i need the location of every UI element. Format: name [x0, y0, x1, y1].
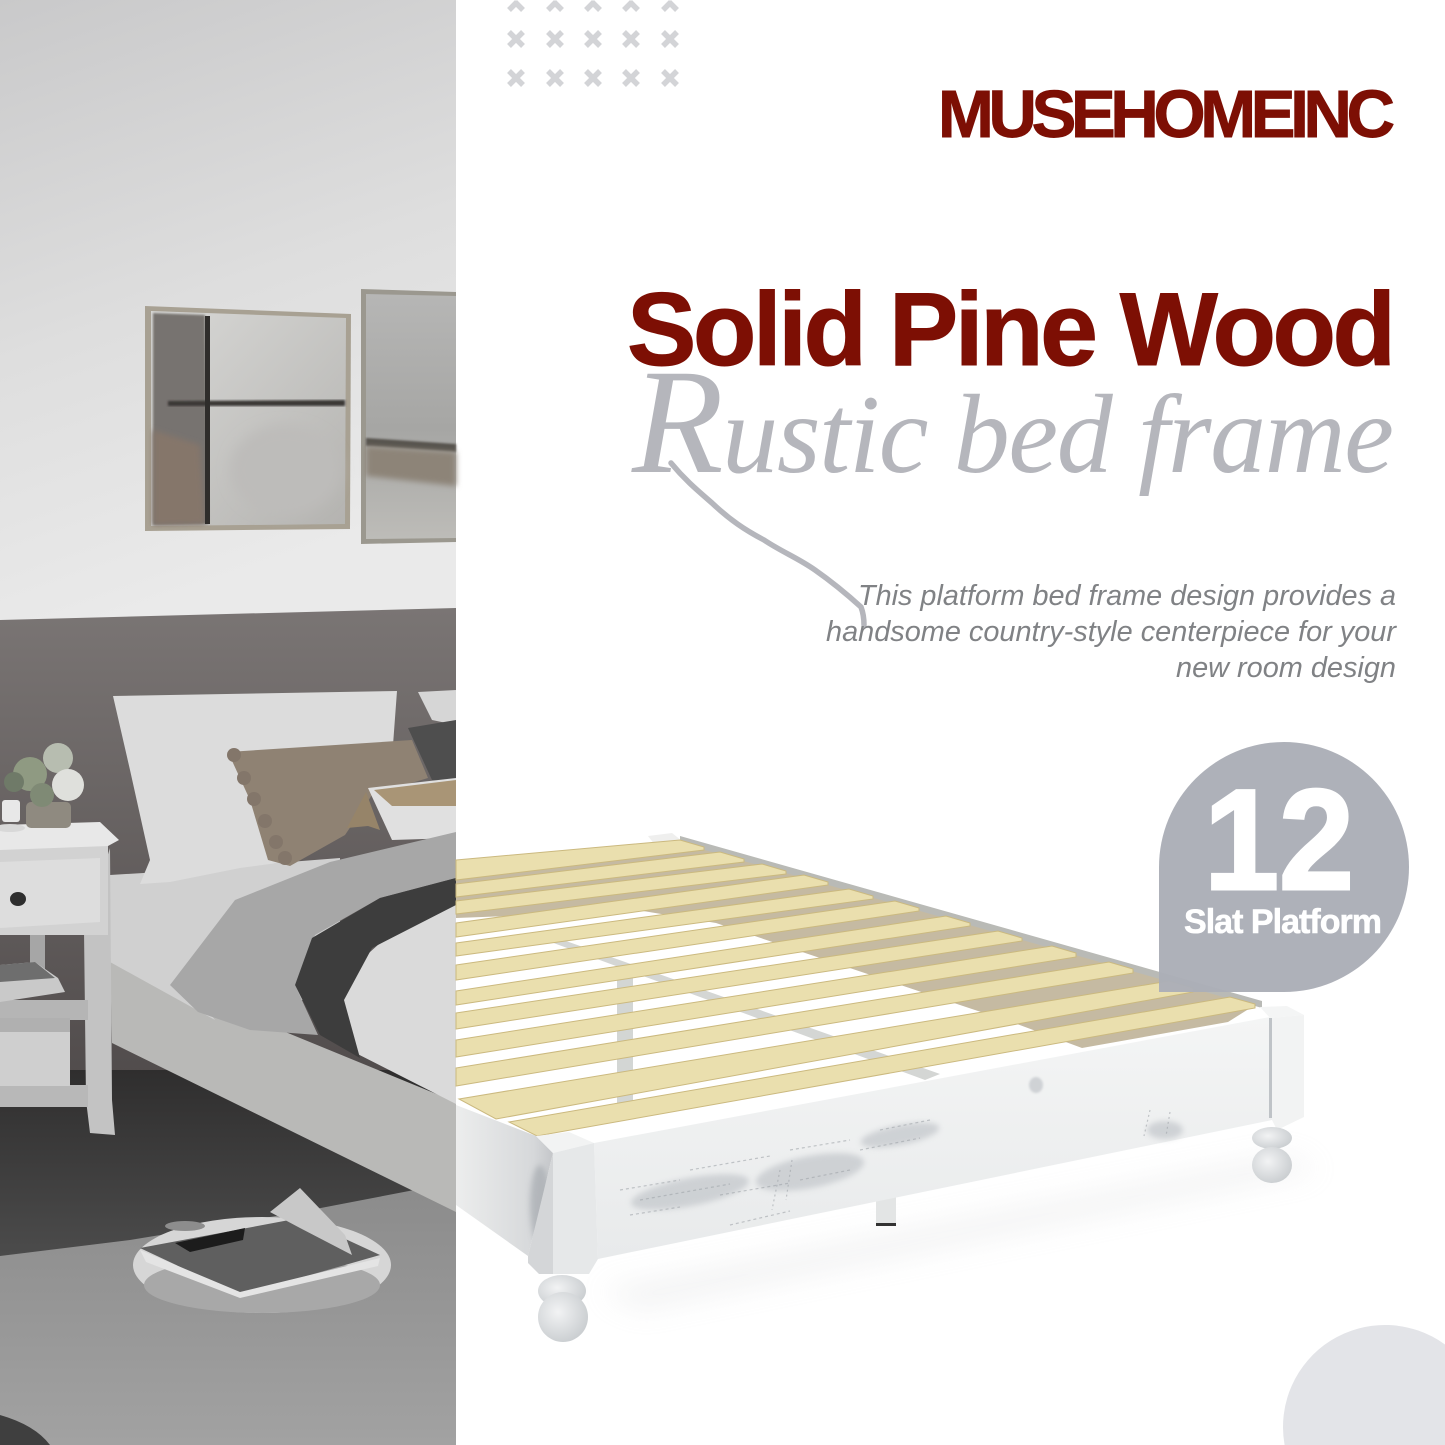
painting: horizon abstract	[361, 289, 456, 544]
dark duvet band	[295, 878, 456, 1058]
grey knit throw	[170, 832, 456, 1035]
back pillow right	[418, 690, 456, 725]
badge number: 12	[1204, 761, 1354, 920]
badge shape	[1159, 742, 1409, 992]
distressed marks	[620, 1110, 1170, 1225]
floor	[0, 1070, 456, 1280]
centre support leg	[876, 1195, 896, 1226]
badge: 12 slat platform	[1159, 742, 1409, 992]
tan tasseled cushion	[347, 778, 456, 840]
white pillow	[113, 691, 397, 884]
painting: cross abstract	[145, 306, 351, 531]
heading: Solid Pine Wood: Solid Pine Wood	[627, 272, 1396, 388]
white duvet	[330, 900, 456, 1104]
description text: new room design	[1176, 652, 1396, 684]
brand name: MUSEHOMEINC	[938, 77, 1395, 152]
wooden slats	[456, 840, 1255, 1136]
dark cushion	[408, 720, 456, 782]
front rail	[594, 1017, 1272, 1259]
left side rail	[456, 1105, 553, 1256]
swash tail of script heading	[671, 463, 864, 625]
fitted sheet	[110, 858, 340, 1020]
description text	[826, 580, 1398, 684]
distressed blotches	[530, 1077, 1183, 1245]
description text: handsome country-style centerpiece for your	[826, 616, 1398, 648]
script subheading: Rustic bed frame: Rustic bed frame	[631, 339, 1394, 505]
front corner post	[528, 1132, 598, 1274]
panel: bedroom photo	[0, 0, 456, 1445]
nightstand	[0, 822, 119, 1135]
rug	[0, 1182, 456, 1445]
right inner rail	[680, 836, 1262, 1008]
description text: This platform bed frame design provides a	[858, 580, 1396, 612]
lower wall	[0, 608, 456, 1100]
centre rail	[540, 936, 940, 1080]
flower vase	[0, 743, 84, 832]
right corner post	[1260, 1006, 1304, 1130]
magazine tray	[133, 1188, 391, 1313]
bed side rail	[110, 960, 456, 1212]
front ball foot	[538, 1275, 588, 1342]
product: platform bed frame	[456, 833, 1320, 1342]
badge label: Slat Platform	[1184, 903, 1382, 941]
back corner block	[648, 833, 682, 845]
right ball foot	[1252, 1127, 1292, 1183]
under-slat shadow	[456, 840, 1255, 1048]
vertical support	[617, 975, 633, 1105]
brown knit cushion	[227, 740, 428, 866]
decoration: x pattern	[509, 2, 677, 85]
upper wall	[0, 0, 456, 625]
floor shadow	[600, 1155, 1320, 1310]
decorative corner circle	[1283, 1325, 1445, 1445]
